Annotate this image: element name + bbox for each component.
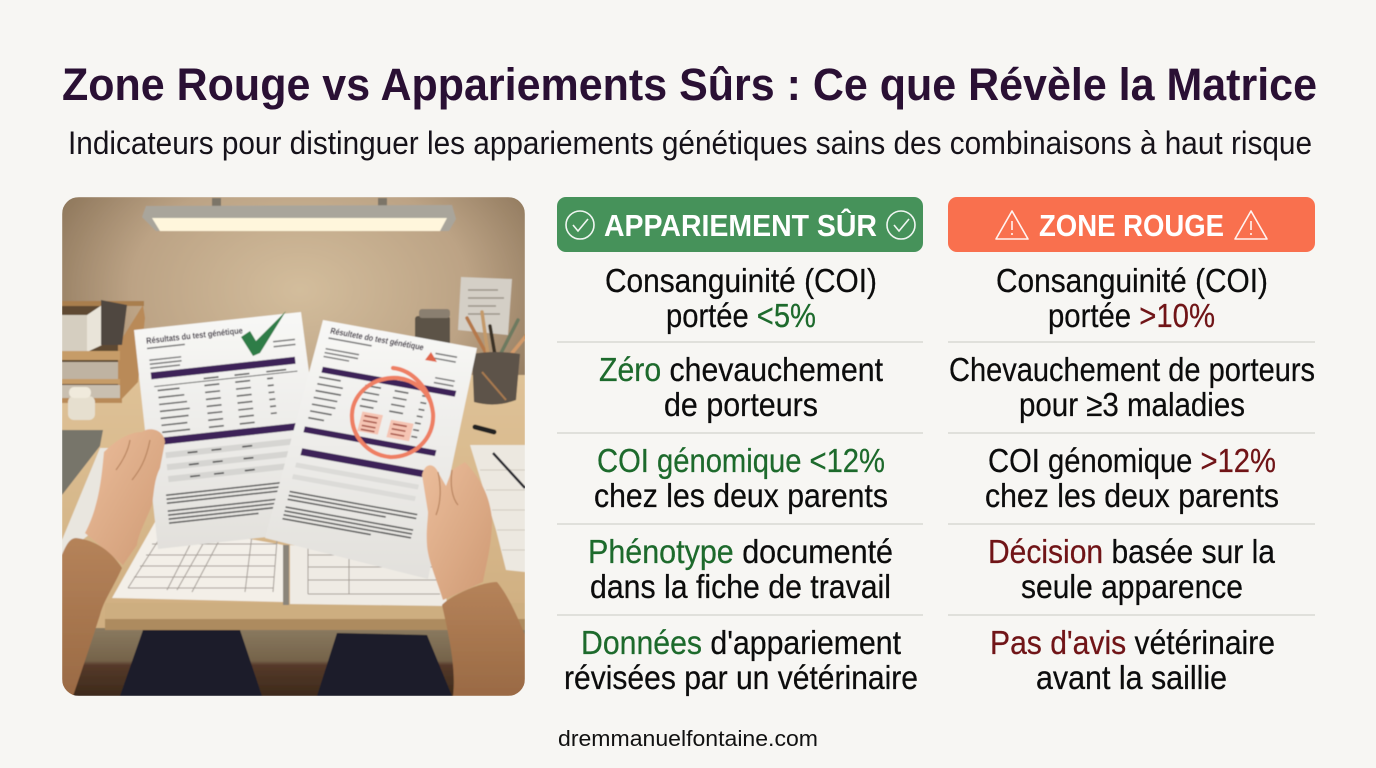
icon: ceiling lamp — [142, 198, 456, 231]
right report paper with red circle — [265, 320, 477, 579]
row: données: Données d'appariement — [581, 624, 901, 661]
open notebook with ruled grid — [112, 522, 447, 606]
row: données: révisées par un vétérinaire — [564, 659, 918, 696]
header: appariement sûr — [557, 197, 923, 252]
row: COI génomique: chez les deux parents — [985, 477, 1279, 514]
desk front edge — [105, 603, 525, 630]
row: COI portée: portée <5% — [666, 297, 816, 334]
legs — [120, 630, 452, 696]
row: données — [564, 624, 918, 696]
mug — [415, 309, 450, 348]
right hand and forearm — [422, 462, 525, 696]
pencil cup — [467, 312, 526, 405]
row: zéro chevauchement — [599, 351, 883, 423]
wall — [62, 197, 525, 376]
row: chevauchement — [949, 351, 1315, 423]
row: COI portée: portée >10% — [1048, 297, 1215, 334]
header: zone rouge: ZONE ROUGE — [1039, 208, 1224, 243]
row: COI portée: Consanguinité (COI) — [605, 262, 877, 299]
header: appariement sûr: APPARIEMENT SÛR — [604, 207, 877, 243]
row: COI génomique: COI génomique <12% — [597, 442, 885, 479]
left hand and forearm — [62, 429, 165, 696]
row: zéro chevauchement: Zéro chevauchement — [599, 351, 883, 388]
row: pas d'avis — [990, 624, 1275, 696]
shelf with folders — [62, 300, 145, 403]
red hand-drawn circle — [352, 368, 433, 457]
left report paper with green check — [134, 311, 330, 549]
row: COI génomique: chez les deux parents — [594, 477, 888, 514]
icon: warning left — [996, 211, 1028, 239]
panel: safe pairing column — [557, 197, 923, 696]
bottle — [68, 387, 95, 420]
row: chevauchement: Chevauchement de porteurs — [949, 351, 1315, 388]
note on wall — [458, 277, 512, 335]
panel: red zone column — [948, 197, 1315, 696]
row: COI portée — [605, 262, 877, 334]
icon: green check — [241, 311, 286, 356]
left loose sheet — [62, 448, 112, 556]
header: zone rouge — [948, 197, 1315, 252]
icon: check circle left — [566, 211, 594, 239]
icon: warning right — [1235, 211, 1267, 239]
row: COI portée — [996, 262, 1268, 334]
row: phénotype — [588, 533, 893, 605]
row: décision: seule apparence — [1021, 568, 1243, 605]
title: Zone Rouge vs Appariements Sûrs : Ce que Révèle la Matrice — [62, 59, 1317, 110]
row: phénotype: Phénotype documenté — [588, 533, 893, 570]
row: pas d'avis: avant la saillie — [1036, 659, 1227, 696]
row: pas d'avis: Pas d'avis vétérinaire — [990, 624, 1275, 661]
icon: warning triangle — [425, 352, 437, 362]
right loose sheet — [470, 445, 525, 572]
desk surface — [62, 375, 525, 635]
panel: photo of hands holding two genetic test reports — [62, 197, 526, 696]
dark clip — [475, 427, 494, 432]
floor and under desk — [62, 628, 525, 696]
row: zéro chevauchement: de porteurs — [664, 386, 818, 423]
row: phénotype: dans la fiche de travail — [590, 568, 891, 605]
left report paper with green check: Résultats du test génétique — [146, 325, 243, 346]
row: COI portée: Consanguinité (COI) — [996, 262, 1268, 299]
right report paper with red circle: Résultete do test génétique — [329, 326, 425, 352]
row: COI génomique: COI génomique >12% — [988, 442, 1276, 479]
left sleeve — [62, 538, 122, 696]
icon: check circle right — [887, 211, 915, 239]
row: décision: Décision basée sur la — [988, 533, 1276, 570]
grey binder left — [62, 430, 103, 495]
row: chevauchement: pour ≥3 maladies — [1019, 386, 1245, 423]
subtitle: Indicateurs pour distinguer les appariements génétiques sains des combinaisons à haut risque — [68, 125, 1312, 161]
row: décision — [988, 533, 1276, 605]
footer url: dremmanuelfontaine.com — [558, 726, 818, 751]
right sleeve — [442, 582, 525, 696]
row: COI génomique — [985, 442, 1279, 514]
row: COI génomique — [594, 442, 888, 514]
